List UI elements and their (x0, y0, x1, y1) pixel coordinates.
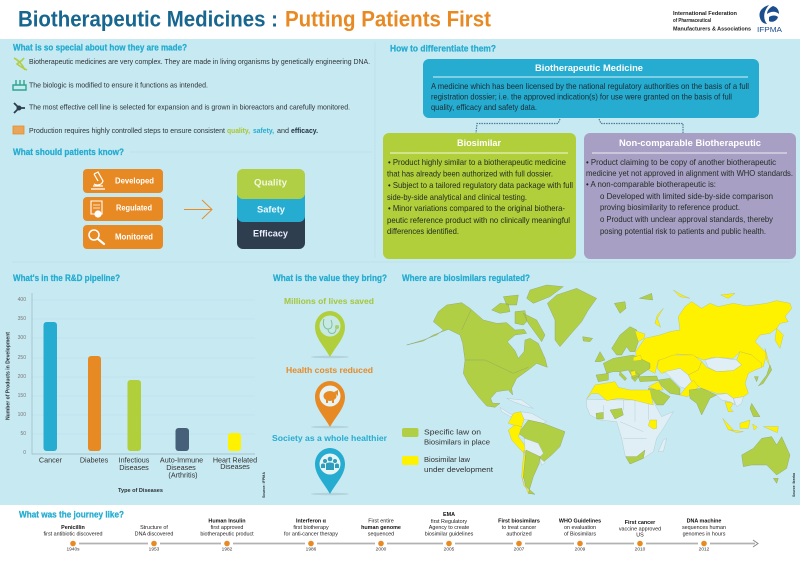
box: non-comparable biotherapeutic: o Product with unclear approval standards, thereby (600, 214, 774, 224)
logo: IFPMA: International Federation (673, 11, 737, 17)
event: EMA: 2005 (444, 546, 455, 552)
stack: quality safety efficacy: Efficacy (253, 228, 289, 240)
legend: Biosimilars in place (424, 438, 490, 446)
event: cancer vaccine (619, 520, 661, 552)
button: monitored (83, 225, 163, 249)
stack: quality safety efficacy: Quality (254, 178, 288, 188)
box: biosimilar: side-by-side analytical and clinical testing. (387, 192, 527, 202)
label: millions of lives saved: Millions of lives saved (284, 296, 374, 306)
bar chart: Heart Related (213, 456, 257, 464)
region: Africa (587, 399, 673, 464)
region: North America (407, 285, 597, 407)
stack: quality safety efficacy: Safety (257, 204, 286, 216)
box: biotherapeutic medicine: quality, efficacy and safety data. (431, 102, 537, 112)
bar chart: Diabetes (80, 456, 109, 464)
bar chart: 400 (18, 297, 26, 303)
button: developed (83, 169, 163, 193)
button: regulated (83, 197, 163, 221)
panel: R&D pipeline (6, 273, 266, 498)
event: interferon (284, 518, 338, 552)
heading: journey: What was the journey like? (19, 510, 124, 520)
event: penicillin: first antibiotic discovered (43, 532, 103, 538)
event: DNA machine: sequences human (682, 525, 726, 531)
title (18, 6, 492, 32)
event: human insulin: Human Insulin (208, 518, 246, 524)
event: human insulin: biotherapeutic product (200, 532, 254, 538)
event: DNA machine: genomes in hours (683, 532, 726, 538)
box: biosimilar: that has already been authorized with full dossier. (387, 168, 553, 178)
bar: diabetes (88, 356, 101, 451)
event: human genome: human genome (361, 525, 401, 531)
box: biosimilar: • Minor variations compared to the original biothera- (388, 203, 565, 213)
button: monitored: Monitored (115, 232, 153, 242)
statement: cell line: The most effective cell line is selected for expansion and is grown in bioreactors and carefully monitored. (29, 102, 350, 112)
bar chart: 250 (18, 355, 26, 361)
bar chart: 50 (20, 431, 26, 437)
stack: quality safety efficacy (237, 169, 305, 249)
bar: infectious diseases (128, 380, 141, 451)
panel: journey timeline (19, 510, 758, 552)
event: interferon: first biotherapy (293, 525, 329, 531)
legend: Specific law on (424, 428, 481, 436)
bar chart: Infectious (119, 456, 150, 464)
event: penicillin: Penicillin (61, 525, 85, 531)
event: interferon: for anti-cancer therapy (284, 532, 338, 538)
box: biotherapeutic medicine: Biotherapeutic Medicine (535, 63, 643, 73)
bar: auto-immune diseases (176, 428, 189, 451)
pin: stethoscope (311, 311, 349, 358)
logo: IFPMA: Manufacturers & Associations (673, 26, 751, 32)
event: EMA: EMA (443, 512, 455, 518)
box: non-comparable biotherapeutic: Non-comparable Biotherapeutic (619, 138, 761, 148)
event: EMA (425, 512, 474, 552)
bar chart: (Arthritis) (168, 470, 198, 480)
legend: Biosimilar law (424, 455, 471, 464)
arrow (184, 200, 212, 219)
event: WHO guidelines: 2009 (575, 546, 586, 552)
event: first biosimilars (498, 518, 540, 552)
pin: piggy bank (311, 381, 349, 428)
statement: modified: The biologic is modified to ensure it functions as intended. (29, 80, 208, 90)
bar chart: Diseases (119, 463, 149, 472)
logo: IFPMA: IFPMA (757, 25, 782, 34)
bar chart: 150 (18, 393, 26, 399)
statement: production: Production requires highly controlled steps to ensure consistent (29, 126, 225, 135)
legend: under development (424, 465, 494, 474)
bar chart: Type of Diseases (118, 488, 163, 494)
statement: production: efficacy. (291, 126, 318, 135)
bar chart: Number of Products in Development (6, 332, 12, 420)
label: health costs reduced: Health costs reduced (286, 365, 373, 375)
event: first biosimilars: First biosimilars (498, 518, 540, 524)
event: DNA structure: Structure of (140, 525, 168, 531)
event: penicillin: 1940s (66, 546, 80, 552)
heading: regulated: Where are biosimilars regulated? (402, 273, 530, 283)
heading: patients: What should patients know? (13, 147, 124, 157)
icon: cell line (14, 103, 25, 113)
event: first biosimilars: authorized (506, 532, 532, 538)
event: penicillin (43, 525, 103, 552)
box: biosimilar: Biosimilar (457, 138, 502, 148)
panel: value they bring (272, 273, 388, 495)
bar chart: Source: IFPMA (262, 472, 266, 498)
heading: pipeline: What's in the R&D pipeline? (13, 273, 120, 283)
event: WHO guidelines: of Biosimilars (564, 532, 596, 538)
legend (402, 428, 494, 474)
bar: heart related diseases (228, 433, 241, 451)
panel: how they are made (13, 43, 370, 135)
event: DNA structure: 1953 (149, 546, 160, 552)
event: WHO guidelines: WHO Guidelines (559, 518, 601, 524)
bar chart: Diseases (220, 462, 250, 471)
bar chart: 300 (18, 335, 26, 341)
logo: IFPMA: of Pharmaceutical (673, 18, 711, 24)
heading: how they are made: What is so special about how they are made? (13, 43, 187, 53)
box: biosimilar (383, 133, 576, 259)
event: DNA structure: DNA discovered (135, 532, 173, 538)
icon: test tubes (13, 80, 26, 90)
button: regulated: Regulated (116, 204, 152, 212)
box: biosimilar: peutic reference product with no clinically meaningful (387, 215, 570, 225)
box: biotherapeutic medicine (423, 59, 759, 118)
event: interferon: 1986 (306, 546, 317, 552)
region: Australia (742, 437, 790, 483)
bar: cancer (44, 322, 57, 451)
box: non-comparable biotherapeutic: posing potential risk to patients and public health. (600, 226, 766, 236)
bar chart: Auto-Immune (160, 456, 203, 464)
event: EMA: first Regulatory (431, 519, 467, 525)
box: biotherapeutic medicine: registration dossier; i.e. the approved indication(s) for use were granted on the basis of full (431, 92, 732, 102)
event: cancer vaccine: 2010 (635, 546, 646, 552)
pin: people (311, 448, 349, 495)
box: non-comparable biotherapeutic: • Product claiming to be copy of another biotherapeutic (586, 157, 776, 167)
panel: where biosimilars are regulated (402, 273, 796, 497)
event: human genome: sequenced (368, 532, 394, 538)
statement: production: safety, (253, 126, 274, 135)
event: cancer vaccine: First cancer (625, 520, 656, 526)
event: first biosimilars: 2007 (514, 546, 525, 552)
event: human genome: First entire (368, 518, 394, 524)
box: biosimilar: • Product highly similar to a biotherapeutic medicine (388, 157, 566, 167)
event: human genome (361, 518, 401, 552)
event: human insulin: 1982 (222, 546, 233, 552)
box: biotherapeutic medicine: A medicine which has been licensed by the national regulatory authorities on the basis of a full (431, 81, 749, 91)
button: developed: Developed (115, 176, 154, 186)
source note: Source: Ibeeka (792, 472, 796, 497)
event: WHO guidelines (559, 518, 601, 552)
box: non-comparable biotherapeutic: • A non-comparable biotherapeutic is: (586, 179, 716, 189)
event: cancer vaccine: US (636, 532, 644, 538)
title: Biotherapeutic Medicines : (18, 6, 278, 32)
box: biosimilar: • Subject to a tailored regulatory data package with full (388, 180, 573, 190)
box: non-comparable biotherapeutic: o Developed with limited side-by-side comparison (600, 191, 773, 201)
event: DNA machine: 2012 (699, 546, 710, 552)
event: human insulin (200, 518, 254, 552)
event: interferon: Interferon α (296, 518, 327, 524)
event: cancer vaccine: vaccine approved (619, 526, 661, 532)
region: Central America and Caribbean (500, 398, 533, 417)
bar chart: 0 (23, 450, 26, 456)
heading: value: What is the value they bring? (273, 273, 387, 283)
bar chart: 350 (18, 316, 26, 322)
event: first biosimilars: to treat cancer (502, 525, 536, 531)
statement: complexity: Biotherapeutic medicines are very complex. They are made in living organisms by genetically engineering DNA. (29, 57, 370, 66)
logo: IFPMA (673, 5, 782, 34)
panel: how to differentiate (383, 44, 796, 259)
bar chart: Cancer (39, 456, 63, 464)
icon: production (13, 126, 24, 134)
box: non-comparable biotherapeutic (584, 133, 796, 259)
bar chart: 200 (18, 374, 26, 380)
label: society healthier: Society as a whole healthier (272, 433, 388, 443)
event: DNA machine (682, 518, 726, 552)
event: WHO guidelines: on evaluation (564, 525, 596, 531)
statement: production: quality, (227, 126, 250, 135)
event: DNA machine: DNA machine (687, 518, 721, 524)
panel: what patients should know (13, 147, 305, 249)
bar chart: 100 (18, 412, 26, 418)
event: human insulin: first approved (211, 525, 243, 531)
statement: production: and (277, 126, 289, 135)
world map (407, 285, 792, 494)
region: Eurasia and Oceania (587, 290, 792, 433)
event: DNA structure (135, 525, 173, 552)
region: South America (508, 412, 565, 494)
title: Putting Patients First (285, 6, 492, 32)
bar chart: Diseases (166, 463, 196, 472)
bar chart (6, 293, 266, 498)
event: EMA: Agency to create (429, 525, 469, 531)
box: biosimilar: differences identified. (387, 226, 459, 236)
box: non-comparable biotherapeutic: proving biosimilarity to reference product. (600, 202, 740, 212)
heading: differentiate: How to differentiate them? (390, 44, 496, 54)
event: human genome: 2000 (376, 546, 387, 552)
timeline axis (70, 540, 758, 547)
icon: DNA (14, 58, 27, 70)
connectors (476, 119, 683, 133)
event: EMA: biosimilar guidelines (425, 532, 474, 538)
